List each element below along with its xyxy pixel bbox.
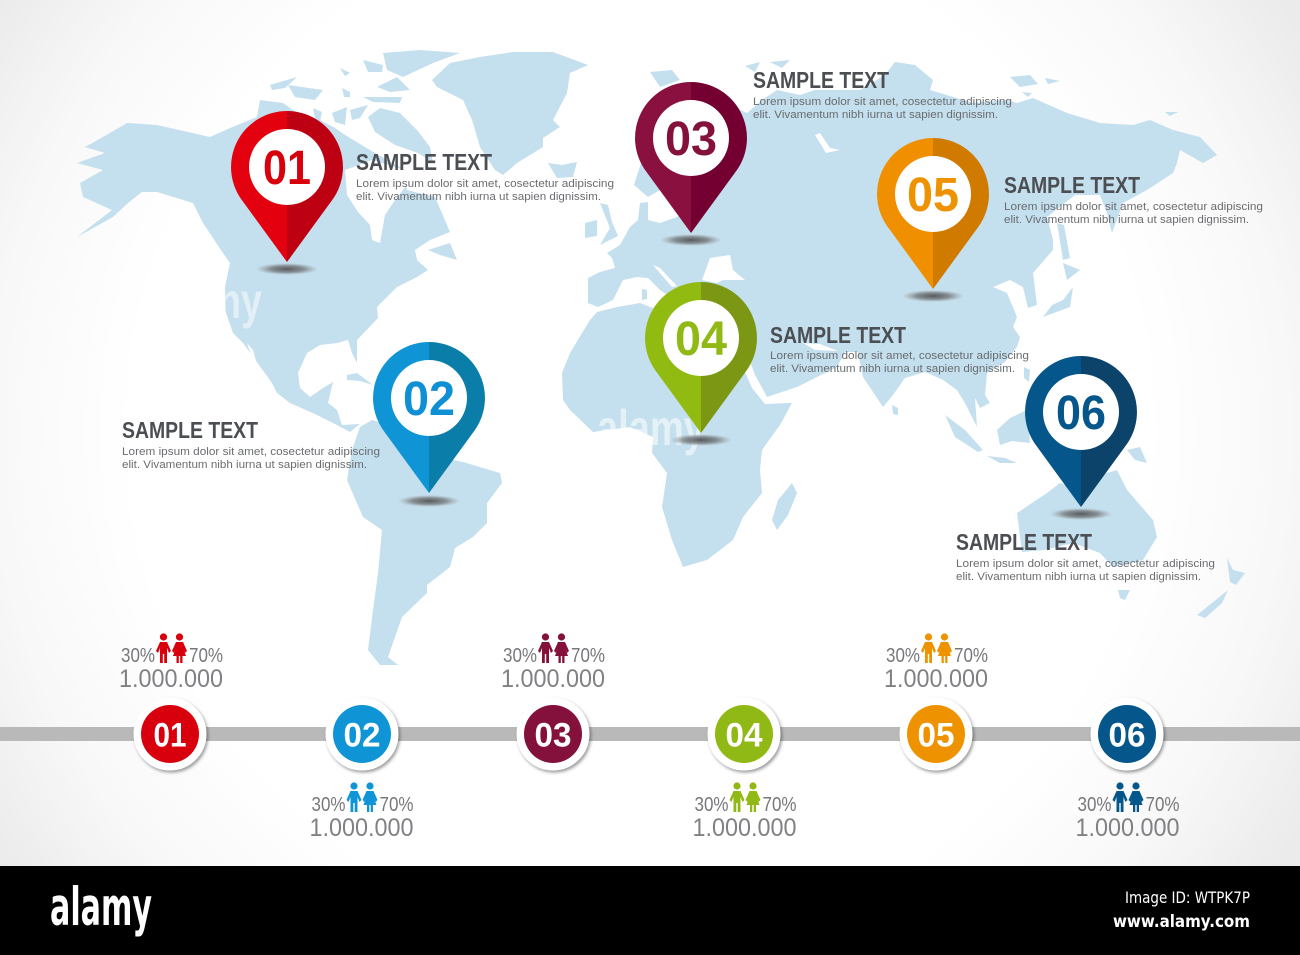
map: Madagascar bbox=[772, 483, 797, 530]
stat 05: 1.000.000 bbox=[884, 665, 988, 693]
stat 04 bbox=[692, 782, 797, 842]
stat 04: 30% bbox=[694, 794, 729, 816]
map: Southeast Asian islands bbox=[892, 367, 1147, 463]
stat 03: 1.000.000 bbox=[501, 665, 605, 693]
pin 02: 02 bbox=[403, 373, 455, 426]
timeline node 04: 04 bbox=[726, 716, 763, 754]
stat 04: 70% bbox=[762, 794, 797, 816]
stat 06: 30% bbox=[1078, 794, 1112, 816]
pin 03 bbox=[635, 82, 747, 246]
map: Tasmania and New Zealand bbox=[1118, 558, 1245, 618]
stat 04: 1.000.000 bbox=[692, 814, 796, 842]
timeline node 01: 01 bbox=[154, 716, 186, 754]
stat 05: 30% bbox=[886, 645, 920, 667]
stat 02: 30% bbox=[312, 794, 346, 816]
footer image id: Image ID: WTPK7P bbox=[1125, 888, 1250, 907]
text block 05: elit. Vivamentum nibh iurna ut sapien dignissim. bbox=[1004, 214, 1249, 226]
pin 01: 01 bbox=[263, 142, 311, 195]
stat 06 bbox=[1076, 782, 1180, 842]
stat 06: 1.000.000 bbox=[1076, 814, 1180, 842]
stat 02 bbox=[310, 782, 414, 842]
stat 05 bbox=[884, 633, 988, 693]
text block 02: SAMPLE TEXT bbox=[122, 417, 258, 443]
watermark: alamy on Africa: alamy bbox=[597, 400, 705, 456]
text block 02: Lorem ipsum dolor sit amet, cosectetur adipiscing bbox=[122, 446, 380, 458]
map: arctic bits bbox=[650, 60, 1178, 116]
text block 05: SAMPLE TEXT bbox=[1004, 172, 1140, 198]
text block 06 bbox=[956, 529, 1215, 583]
text block 05: Lorem ipsum dolor sit amet, cosectetur adipiscing bbox=[1004, 201, 1263, 213]
timeline node 06: 06 bbox=[1108, 716, 1146, 754]
map: United Kingdom and Ireland bbox=[585, 203, 618, 245]
timeline node 03 bbox=[516, 698, 590, 770]
stat 01: 70% bbox=[189, 645, 223, 667]
footer url: www.alamy.com bbox=[1113, 912, 1250, 932]
footer bar bbox=[0, 866, 1300, 955]
text block 01: Lorem ipsum dolor sit amet, cosectetur adipiscing bbox=[356, 178, 614, 190]
map: Africa bbox=[562, 303, 792, 567]
stat 01: 30% bbox=[121, 645, 155, 667]
map: Caribbean islands bbox=[347, 373, 373, 385]
text block 04: SAMPLE TEXT bbox=[770, 322, 906, 348]
pin 05: 05 bbox=[907, 169, 959, 222]
map: Persian Gulf bbox=[803, 343, 838, 351]
map: Iceland bbox=[548, 162, 577, 178]
stat 03: 30% bbox=[503, 645, 537, 667]
map: Gulf of California bbox=[247, 343, 260, 375]
stat 01: 1.000.000 bbox=[119, 665, 223, 693]
text block 02 bbox=[122, 417, 380, 471]
text block 01 bbox=[356, 149, 614, 203]
stat 02: 1.000.000 bbox=[310, 814, 414, 842]
stat 01 bbox=[119, 633, 223, 693]
watermark: alamy on North America: ny bbox=[218, 273, 262, 329]
map: Eurasia bbox=[588, 62, 1217, 427]
timeline bar bbox=[0, 727, 1300, 741]
text block 06: elit. Vivamentum nibh iurna ut sapien dignissim. bbox=[956, 571, 1201, 583]
timeline node 01 bbox=[134, 698, 206, 770]
text block 06: SAMPLE TEXT bbox=[956, 529, 1092, 555]
map: Black Sea bbox=[702, 255, 745, 283]
pin 02 bbox=[373, 342, 485, 507]
text block 04: Lorem ipsum dolor sit amet, cosectetur adipiscing bbox=[770, 350, 1029, 362]
map: Greenland bbox=[432, 52, 588, 175]
map: Adriatic Sea bbox=[653, 265, 677, 287]
timeline node 05: 05 bbox=[918, 716, 954, 754]
text block 06: Lorem ipsum dolor sit amet, cosectetur adipiscing bbox=[956, 558, 1215, 570]
map: Sardinia and Corsica bbox=[642, 289, 647, 300]
map: Australia bbox=[1017, 470, 1157, 567]
map: Hudson Bay bbox=[345, 160, 407, 243]
world map bbox=[77, 50, 1245, 665]
stat 05: 70% bbox=[954, 645, 988, 667]
text block 03 bbox=[753, 67, 1012, 121]
text block 02: elit. Vivamentum nibh iurna ut sapien dignissim. bbox=[122, 459, 367, 471]
timeline node 04 bbox=[708, 698, 780, 770]
timeline node 06 bbox=[1090, 698, 1164, 770]
map: Newfoundland bbox=[428, 243, 457, 260]
stat 06: 70% bbox=[1146, 794, 1180, 816]
map: South America bbox=[347, 420, 502, 665]
stat 02: 70% bbox=[380, 794, 414, 816]
map: Ob gulf bbox=[815, 133, 840, 153]
text block 03: elit. Vivamentum nibh iurna ut sapien dignissim. bbox=[753, 109, 998, 121]
timeline node 02: 02 bbox=[344, 716, 380, 754]
text block 03: Lorem ipsum dolor sit amet, cosectetur adipiscing bbox=[753, 96, 1012, 108]
timeline node 02 bbox=[326, 698, 398, 770]
stat 03 bbox=[501, 633, 605, 693]
map: Japan and Sakhalin bbox=[1043, 223, 1080, 317]
text block 01: elit. Vivamentum nibh iurna ut sapien dignissim. bbox=[356, 191, 601, 203]
pin 03: 03 bbox=[665, 113, 717, 166]
timeline node 05 bbox=[900, 698, 972, 770]
pin 01 bbox=[231, 111, 343, 275]
pin 05 bbox=[877, 138, 989, 302]
pin 04: 04 bbox=[675, 313, 727, 366]
footer logo: alamy bbox=[50, 877, 152, 938]
text block 03: SAMPLE TEXT bbox=[753, 67, 889, 93]
pin 06 bbox=[1025, 356, 1137, 520]
text block 04: elit. Vivamentum nibh iurna ut sapien dignissim. bbox=[770, 363, 1015, 375]
text block 05 bbox=[1004, 172, 1263, 226]
timeline node 03: 03 bbox=[534, 716, 572, 754]
text block 04 bbox=[770, 322, 1029, 375]
pin 06: 06 bbox=[1056, 387, 1106, 440]
map: Scandinavia bbox=[634, 110, 700, 197]
text block 01: SAMPLE TEXT bbox=[356, 149, 492, 175]
pin 04 bbox=[645, 282, 757, 446]
map: Arctic islands bbox=[270, 50, 460, 163]
map: North America bbox=[77, 100, 450, 432]
stat 03: 70% bbox=[571, 645, 605, 667]
